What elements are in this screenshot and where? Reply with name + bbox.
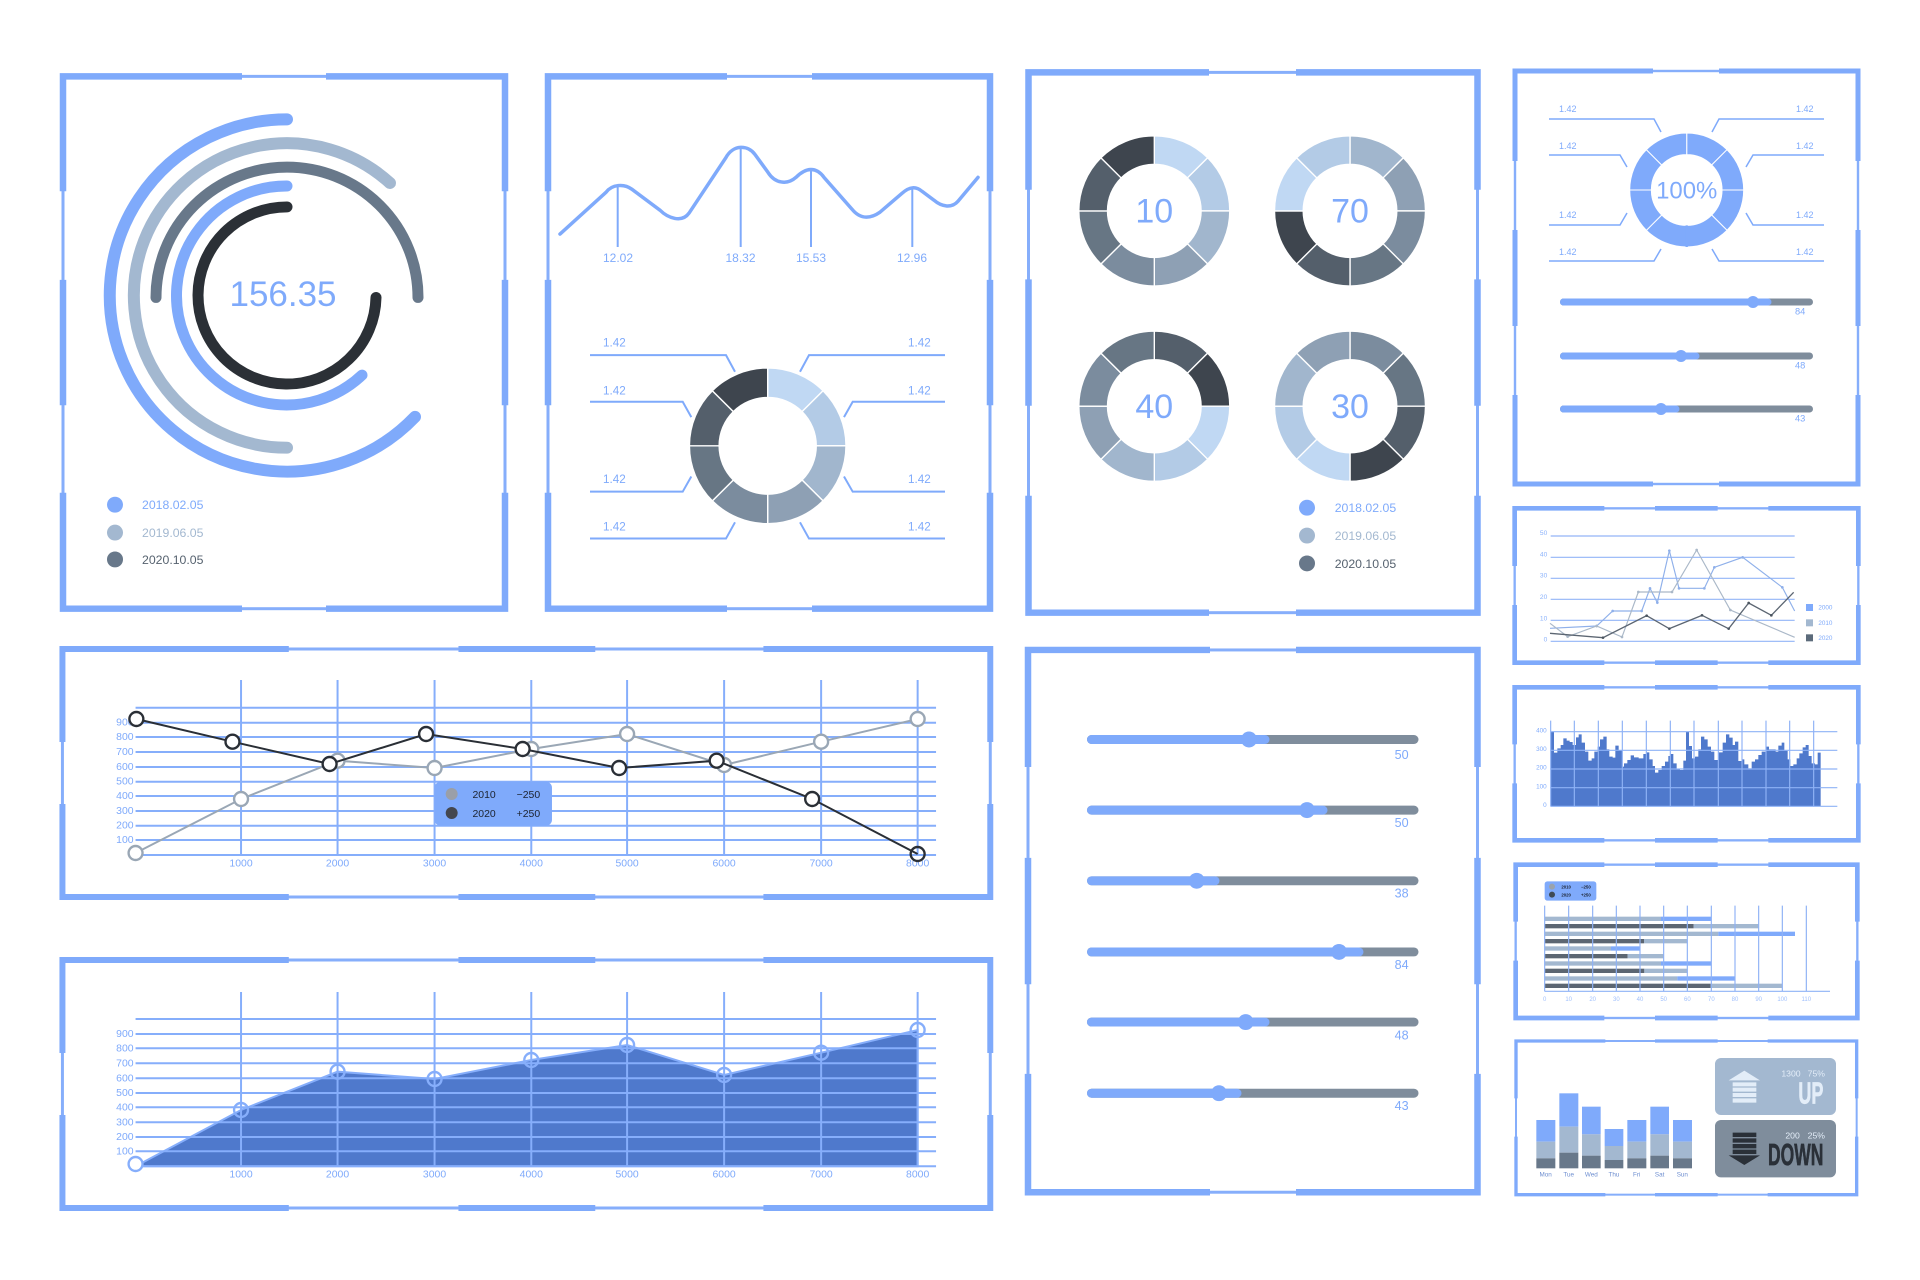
panel: horizontal bars [1516,865,1857,1018]
leader labels [1559,104,1814,257]
axis labels: 200 [1536,765,1547,772]
donut labels: 1.42 [603,521,626,534]
panel: multi-line chart small [1515,508,1858,663]
legend: 2000 [1818,605,1833,612]
donut 100% [1618,121,1756,259]
curve chart: 12.02 [603,251,633,265]
axis labels: 400 [116,1102,134,1113]
slider 84: 84 [1795,306,1805,316]
frame [62,960,990,1208]
curve chart: 12.96 [897,251,927,265]
legend: 2019.06.05 [1335,529,1396,543]
slider 50 second: 50 [1395,816,1409,830]
curve chart [560,147,978,265]
slider 50 [1092,732,1414,762]
markers [129,1023,925,1171]
frame [1028,650,1478,1192]
bars [1551,732,1821,806]
axis labels: 5000 [615,1169,639,1181]
legend: 2010 [472,790,496,801]
axis labels: 40 [1637,997,1644,1003]
card: down: 200 [1785,1131,1800,1141]
axis labels: 700 [116,1058,134,1069]
leader labels: 1.42 [1559,104,1577,114]
axis labels: 4000 [520,1169,543,1181]
legend: 2018.02.05 [142,498,204,512]
lines [1550,550,1795,638]
axis labels [1540,530,1548,644]
axis labels: 6000 [712,1169,736,1181]
card: down: DOWN [1768,1138,1823,1172]
series 2010 [129,712,925,860]
frame [1028,72,1478,613]
axis labels: 20 [1540,594,1548,601]
donut 40: 40 [1135,388,1173,426]
axis labels: 600 [116,1073,134,1084]
donut 40 [1063,316,1245,497]
grid [1545,906,1830,991]
slider 84 [1092,944,1414,972]
axis labels: 2000 [326,1169,349,1181]
axis labels: 80 [1732,997,1739,1003]
axis labels: 500 [116,1088,134,1099]
axis labels: 800 [116,732,134,743]
leader labels: 1.42 [1796,141,1814,151]
axis labels: 30 [1540,573,1548,580]
legend: −250 [517,790,540,801]
frame [1515,508,1858,663]
legend: 2020 [1818,635,1833,642]
axis labels: 400 [1536,727,1547,734]
axis labels: 10 [1565,997,1573,1003]
axis labels: 0 [1544,637,1548,644]
day labels: Wed [1585,1172,1598,1179]
legend [435,782,552,826]
donut 70 [1259,120,1441,302]
panel: histogram [1515,687,1858,840]
leader labels: 1.42 [1559,210,1577,220]
donut labels [603,337,931,534]
card: up: 1300 [1781,1069,1801,1079]
axis labels [1536,727,1547,809]
grid [1551,536,1795,641]
leader lines [1549,119,1824,261]
panel: 100 percent donut with sliders [1515,71,1858,484]
legend: 2020 [472,809,496,820]
axis labels: 8000 [906,1169,929,1181]
day labels: Tue [1563,1172,1574,1179]
donut 10 [1063,120,1245,302]
stacked bars [1536,1093,1692,1168]
axis labels [116,1029,929,1181]
axis labels: 6000 [712,858,736,870]
card: down: 25% [1808,1131,1825,1141]
slider 43 [1564,403,1810,424]
slider 48 [1092,1014,1414,1042]
donut labels: 1.42 [908,337,931,350]
gauge value: 156.35 [229,275,337,314]
axis labels: 100 [1777,997,1788,1003]
grid [136,992,936,1166]
day labels: Sun [1677,1172,1688,1179]
panel: curve and segmented donut [548,76,990,609]
axis labels: 800 [116,1043,134,1054]
donut 70: 70 [1331,193,1369,231]
card: up: UP [1798,1076,1823,1110]
series 2020 [129,712,925,861]
legend: 2020.10.05 [1335,557,1396,571]
frame [1515,687,1858,840]
panel: six sliders [1028,650,1478,1192]
curve chart: 15.53 [796,251,826,265]
curve chart: 18.32 [725,251,756,265]
slider 50 second [1092,802,1414,830]
card: up: 75% [1808,1069,1825,1079]
axis labels: 1000 [229,858,253,870]
legend [1545,881,1596,901]
grid [1551,721,1837,806]
donut labels: 1.42 [603,473,626,486]
slider 84 [1564,296,1810,316]
legend: +250 [517,809,540,820]
legend: 2010 [1561,884,1572,889]
legend: 2020.10.05 [142,553,204,567]
panel: weekly stacks with up and down cards [1516,1041,1857,1195]
legend: 2019.06.05 [142,526,204,540]
axis labels: 100 [116,835,134,846]
panel: concentric radial gauge [63,76,505,609]
panel: area chart [62,960,990,1208]
day labels: Fri [1633,1172,1640,1179]
frame [548,76,990,609]
donut 100%: 100% [1656,178,1717,205]
axis labels: 500 [116,776,134,788]
slider 38 [1092,873,1414,901]
axis labels: 7000 [810,858,833,870]
panel: two-series line chart [62,649,990,897]
legend: 2020 [1561,892,1572,897]
donut labels: 1.42 [908,521,931,534]
leader labels: 1.42 [1796,210,1814,220]
axis labels: 300 [116,806,134,817]
axis labels: 2000 [326,858,349,870]
axis labels: 5000 [615,858,639,870]
axis labels: 0 [1543,997,1547,1003]
axis labels: 100 [116,1146,134,1157]
frame [1516,865,1857,1018]
axis labels: 900 [116,1029,134,1040]
axis labels: 400 [116,791,134,802]
slider 48: 48 [1395,1029,1409,1042]
slider 48 [1564,350,1810,370]
frame [62,649,990,897]
grid [136,680,936,855]
axis labels: 300 [116,1117,134,1128]
donut labels: 1.42 [603,337,626,350]
day labels: Sat [1655,1172,1665,1179]
slider 38: 38 [1395,887,1409,901]
axis labels: 3000 [423,1169,446,1181]
donut leader lines [590,355,945,539]
leader labels: 1.42 [1559,141,1577,151]
axis labels: 60 [1684,997,1691,1003]
axis labels: 70 [1708,997,1715,1003]
donut 30 [1259,316,1441,497]
leader labels: 1.42 [1559,247,1577,257]
legend: 2018.02.05 [1335,501,1396,515]
slider 43 [1092,1085,1414,1113]
donut labels: 1.42 [603,384,626,397]
frame [1515,71,1858,484]
axis labels: 50 [1540,530,1548,537]
axis labels: 40 [1540,551,1548,558]
axis labels: 110 [1802,997,1812,1003]
donut 30: 30 [1331,388,1369,426]
legend: +250 [1581,892,1591,897]
axis labels: 200 [116,820,134,832]
donut 10: 10 [1135,193,1173,231]
frame [1516,1041,1857,1195]
slider 43: 43 [1395,1099,1409,1113]
axis labels: 200 [116,1132,134,1143]
legend [107,497,204,567]
axis labels: 50 [1660,997,1668,1003]
axis labels: 100 [1536,783,1547,790]
donut chart [673,352,862,540]
axis labels: 7000 [810,1169,833,1181]
legend [1299,500,1396,571]
legend: 2010 [1818,620,1833,627]
day labels: Thu [1609,1172,1620,1179]
frame [63,76,505,609]
axis labels: 4000 [520,858,543,870]
axis labels: 600 [116,762,134,773]
card: up [1715,1058,1836,1115]
leader labels: 1.42 [1796,104,1814,114]
slider 50: 50 [1395,748,1409,762]
axis labels: 90 [1755,997,1763,1003]
axis labels: 8000 [906,858,929,870]
axis labels: 1000 [229,1169,253,1181]
donut labels: 1.42 [908,473,931,486]
axis labels [116,717,929,870]
legend [1806,604,1833,642]
radial arcs [110,119,418,472]
leader labels: 1.42 [1796,247,1814,257]
axis labels: 0 [1543,802,1547,809]
legend: −250 [1581,884,1591,889]
axis labels: 20 [1589,997,1597,1003]
axis labels: 30 [1613,997,1620,1003]
donut labels: 1.42 [908,384,931,397]
axis labels: 300 [1536,746,1547,753]
card: down [1715,1120,1836,1177]
axis labels: 700 [116,747,134,758]
axis labels: 10 [1540,615,1548,622]
area [136,1030,918,1166]
slider 48: 48 [1795,360,1805,370]
bars [1545,917,1795,988]
axis labels: 900 [116,717,134,729]
axis labels [1543,997,1812,1003]
slider 84: 84 [1395,958,1409,972]
day labels: Mon [1540,1172,1552,1179]
day labels [1540,1172,1688,1179]
slider 43: 43 [1795,414,1805,424]
panel: four donuts [1028,72,1478,613]
axis labels: 3000 [423,858,446,870]
